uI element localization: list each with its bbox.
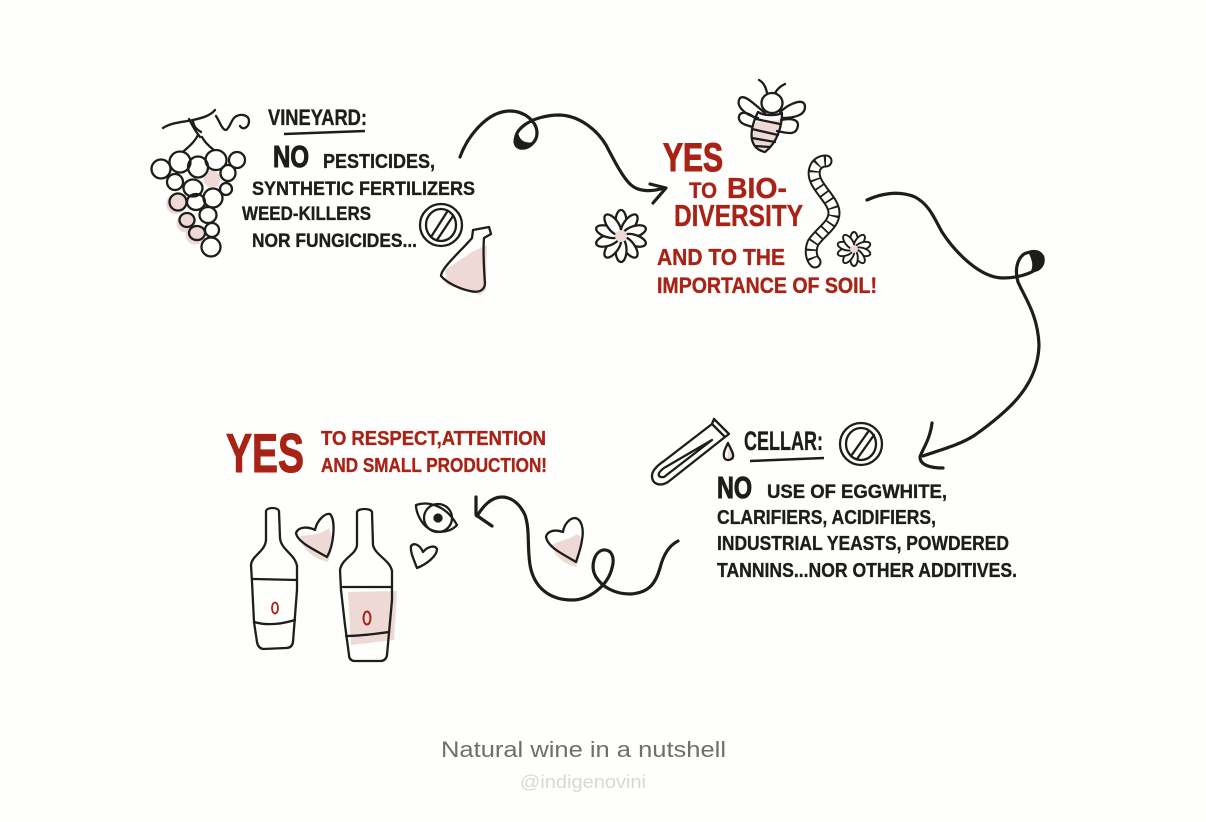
text block: yes to biodiversity: TO [689,178,717,203]
icon: grapes [152,110,249,256]
text block: vineyard: NOR FUNGICIDES... [252,231,417,252]
icon: right bottle [340,509,397,661]
text block: cellar: USE OF EGGWHITE, [767,482,947,503]
icon: worm [811,161,834,262]
arrow: vineyard to biodiversity [460,111,666,203]
text block: vineyard: PESTICIDES, [323,151,435,173]
caption: Natural wine in a nutshell [441,737,726,762]
icon: heart one [296,514,334,562]
text block: yes to respect: AND SMALL PRODUCTION! [321,455,547,477]
icon: eye [416,504,457,532]
arrow: cellar to bottles [476,497,678,600]
text block: yes to respect: YES [226,422,304,484]
text block: yes to respect: TO RESPECT,ATTENTION [321,428,546,450]
text block: cellar: CLARIFIERS, ACIDIFIERS, [717,507,936,529]
text block: yes to respect [226,422,547,484]
icon: prohibition sign [420,204,462,246]
icon: left bottle [251,508,297,649]
text block: yes to biodiversity [657,136,877,298]
icon: small heart [411,544,437,568]
icon: cellar prohibition sign [840,423,882,465]
text block: vineyard [242,105,475,252]
icon: large daisy [595,210,647,262]
icon: small daisy [837,232,871,266]
text block: yes to biodiversity: IMPORTANCE OF SOIL! [657,273,877,298]
text block: yes to biodiversity: YES [663,136,723,180]
text block: vineyard: NO [273,139,309,174]
text block: cellar: CELLAR: [744,426,823,456]
arrow: biodiversity to cellar [867,193,1043,468]
caption: @indigenovini [520,772,646,792]
icon: bee [739,80,805,152]
text block: cellar: NO [717,470,752,505]
text block: yes to biodiversity: BIO- [727,173,787,205]
text block: vineyard: WEED-KILLERS [242,204,371,225]
text block: cellar: TANNINS...NOR OTHER ADDITIVES. [717,560,1017,582]
icon: test tube [652,419,729,484]
text block: yes to biodiversity: AND TO THE [657,244,785,270]
text block: cellar: INDUSTRIAL YEASTS, POWDERED [717,533,1009,555]
text block: vineyard: SYNTHETIC FERTILIZERS [252,179,475,200]
icon: flask [441,227,491,295]
icon: drop [724,443,735,460]
text block: yes to biodiversity: DIVERSITY [674,198,803,233]
text block: vineyard: VINEYARD: [268,105,367,130]
caption [441,737,726,792]
text block: cellar [717,426,1017,582]
icon: heart near arrow [546,518,583,567]
